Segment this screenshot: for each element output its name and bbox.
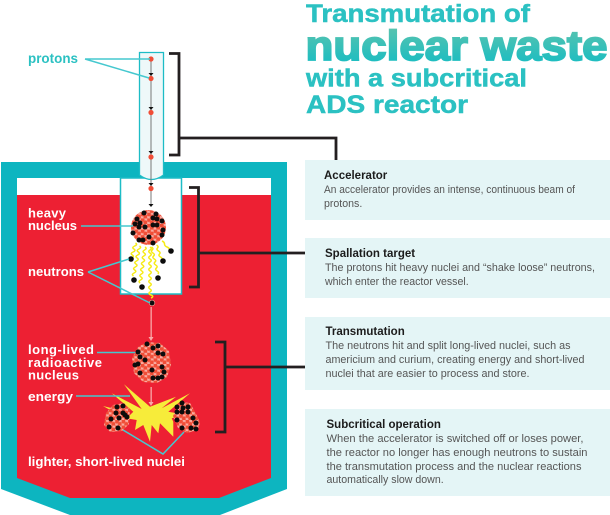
heavy nucleus bbox=[130, 210, 166, 246]
label: protons: protons bbox=[28, 51, 78, 66]
spallation target chamber bbox=[120, 178, 182, 294]
bracket: accelerator bbox=[169, 54, 336, 160]
leader lines bbox=[76, 59, 184, 454]
label: heavy nucleus: nucleus bbox=[28, 218, 77, 233]
panel: accelerator: protons. bbox=[324, 198, 362, 210]
neutrons bbox=[128, 248, 174, 306]
label: heavy nucleus: heavy bbox=[28, 206, 67, 220]
label: energy: energy bbox=[28, 389, 74, 404]
title: nuclear waste bbox=[306, 22, 608, 69]
reactor vessel bbox=[1, 162, 287, 515]
bracket: spallation target bbox=[189, 188, 305, 287]
title bbox=[305, 0, 608, 119]
neutron arrows bbox=[148, 307, 154, 406]
title: with a subcritical bbox=[305, 64, 527, 92]
panel: transmutation: nuclei that are easier to process and store. bbox=[326, 368, 530, 380]
panel: spallation target: The protons hit heavy nuclei and “shake loose” neutrons, bbox=[325, 262, 595, 274]
panel: transmutation bbox=[305, 317, 610, 390]
panel: accelerator: Accelerator bbox=[324, 170, 388, 182]
accelerator tube bbox=[140, 52, 164, 180]
panel: subcritical operation bbox=[305, 409, 610, 496]
label: neutrons: neutrons bbox=[28, 264, 84, 279]
panel: subcritical operation: When the accelerator is switched off or loses power, bbox=[326, 433, 584, 445]
energy burst bbox=[112, 384, 190, 442]
panel: subcritical operation: the transmutation process and the nuclear reactions bbox=[326, 461, 582, 473]
left fragment nucleus bbox=[104, 403, 130, 432]
panel: subcritical operation: automatically slow down. bbox=[326, 474, 444, 486]
panel: subcritical operation: Subcritical operation bbox=[326, 419, 441, 431]
label: long-lived radioactive nucleus: radioactive bbox=[28, 355, 102, 370]
small burst tip bbox=[103, 406, 115, 411]
panel: accelerator: An accelerator provides an intense, continuous beam of bbox=[324, 184, 575, 196]
right fragment nucleus bbox=[173, 400, 200, 433]
label: long-lived radioactive nucleus: long-lived bbox=[28, 342, 94, 357]
label: lighter, short-lived nuclei: lighter, short-lived nuclei bbox=[28, 454, 185, 469]
panel: transmutation: americium and curium, creating energy and short-lived bbox=[326, 354, 585, 366]
panel: spallation target: Spallation target bbox=[325, 248, 415, 260]
panel: spallation target: which enter the reactor vessel. bbox=[324, 276, 469, 288]
panel: spallation target bbox=[305, 238, 610, 298]
panel: transmutation: The neutrons hit and split long-lived nuclei, such as bbox=[326, 340, 570, 352]
proton beam bbox=[148, 56, 154, 207]
panel: accelerator bbox=[305, 160, 610, 220]
neutron paths bbox=[131, 241, 170, 298]
bracket: transmutation bbox=[215, 342, 305, 432]
title: ADS reactor bbox=[306, 91, 468, 119]
panel: transmutation: Transmutation bbox=[326, 326, 405, 338]
panel: subcritical operation: the reactor no longer has enough neutrons to sustain bbox=[326, 447, 588, 459]
long-lived nucleus bbox=[132, 342, 171, 383]
label: long-lived radioactive nucleus: nucleus bbox=[28, 368, 79, 382]
title: Transmutation of bbox=[306, 0, 531, 28]
